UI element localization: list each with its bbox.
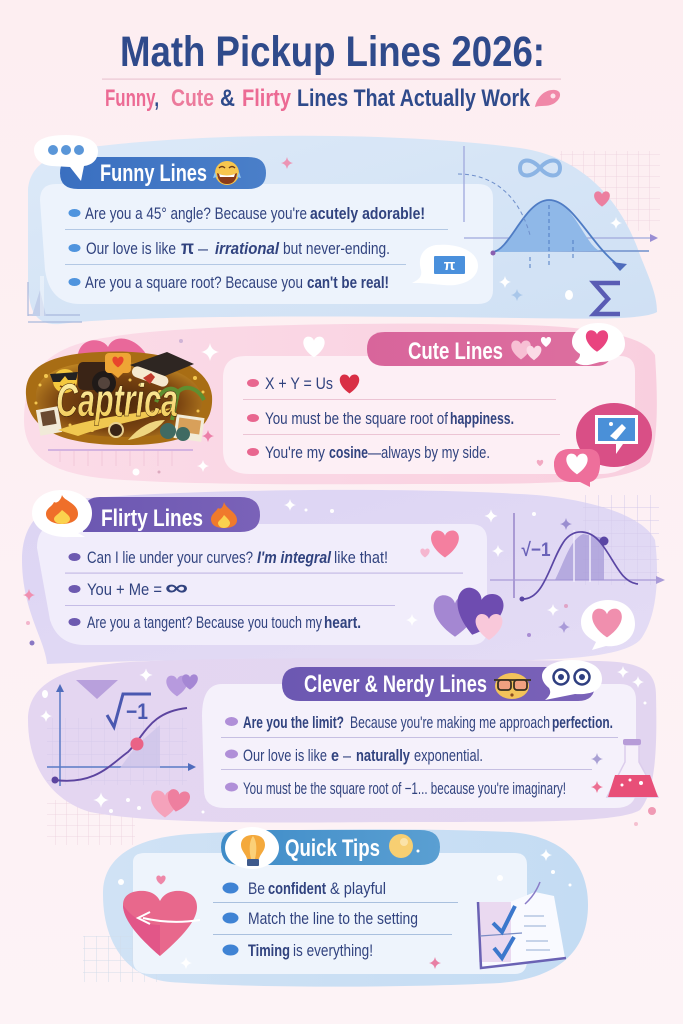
icon: heart with arrow [123, 876, 200, 956]
line 2: happiness. [450, 410, 514, 428]
line 2: irrational [215, 240, 279, 258]
panel: clever & nerdy lines [28, 658, 658, 826]
sigma symbol [594, 283, 620, 314]
line 2 [68, 575, 188, 600]
radical -1 label: √−1 [522, 540, 551, 561]
heading: Flirty Lines [101, 505, 203, 532]
logo: Captrica [26, 339, 212, 445]
header pill [60, 157, 266, 189]
subtitle [105, 85, 531, 112]
inner card [223, 356, 635, 474]
line 3: can't be real! [307, 274, 389, 292]
line 1: X + Y = Us [265, 375, 333, 393]
icon: red heart [340, 375, 359, 393]
decorative grid flirty [583, 495, 659, 585]
icon: pink hearts top [420, 530, 459, 558]
line 2: exponential. [414, 747, 483, 765]
subtitle: & [220, 85, 235, 112]
inner card [40, 184, 493, 304]
sparkles [284, 499, 504, 626]
line 1: perfection. [552, 714, 613, 732]
line 1: & playful [330, 880, 386, 898]
line 3: You're my [265, 444, 326, 462]
heading: Cute Lines [408, 338, 503, 365]
line 2: naturally [356, 747, 411, 765]
subtitle: Flirty [242, 85, 292, 112]
line 3: —always by my side. [368, 444, 490, 462]
line 1: Are you a 45° angle? Because you're [85, 205, 307, 223]
line 3: Timing [248, 942, 290, 960]
line 3: cosine [329, 444, 368, 462]
decorative grid nerdy [47, 800, 135, 845]
line 2: – [343, 747, 352, 765]
icon: white heart [303, 337, 325, 357]
icon: pink pick [535, 90, 560, 107]
icon: flame [211, 502, 237, 528]
subtitle: Funny, [105, 85, 159, 112]
radical -1 label: −1 [126, 699, 148, 724]
integral chart [490, 512, 665, 602]
panel: funny lines [28, 135, 658, 324]
icon: light bulb [225, 827, 279, 869]
line 1: like that! [334, 549, 388, 567]
icon: checklist [478, 882, 566, 968]
icon: pink heart [594, 191, 610, 207]
icon: sun ball [389, 834, 420, 858]
line 2: π [181, 238, 194, 259]
line 2: e [331, 747, 339, 765]
panel: cute lines [24, 323, 657, 487]
line 2: Our love is like [243, 747, 327, 765]
line 2: Match the line to the setting [248, 910, 418, 928]
header pill [367, 332, 612, 366]
triangle [76, 680, 118, 699]
icon: heart bubble [581, 600, 635, 650]
line 2: You + Me = [87, 581, 162, 599]
line 1: I'm integral [257, 549, 331, 567]
line 2: You must be the square root of [265, 410, 448, 428]
line 2: but never-ending. [283, 240, 390, 258]
bullet list [243, 375, 560, 462]
infinity symbol [520, 160, 560, 176]
line 1 [247, 375, 359, 393]
panel: quick tips [83, 827, 588, 987]
header pill [221, 830, 440, 865]
line 3: Are you a square root? Because you [85, 274, 303, 292]
small chart bottom left [28, 276, 82, 322]
bullet list [221, 714, 618, 798]
sparkles [281, 157, 293, 169]
icon: flask [607, 739, 658, 797]
radical -1 label [107, 694, 151, 727]
icon: flame bubble [32, 490, 92, 537]
line 3: is everything! [293, 942, 373, 960]
subtitle: Cute [171, 85, 214, 112]
function chart [47, 684, 196, 786]
axis under logo [48, 339, 219, 476]
heading: Quick Tips [285, 835, 380, 862]
line 1: Be [248, 880, 265, 898]
bullet list [65, 205, 448, 292]
line 1 [222, 880, 386, 898]
inner card [37, 524, 487, 645]
logo wordmark: Captrica [56, 374, 178, 426]
icon: pink hearts [151, 788, 191, 818]
icon: pi speech bubble [412, 245, 478, 285]
icon: purple hearts [166, 674, 198, 696]
line 2: Our love is like [86, 240, 176, 258]
icon: chat bubble with dots [34, 135, 98, 181]
line 3 [222, 942, 373, 960]
heading: Clever & Nerdy Lines [304, 671, 487, 698]
inner card [202, 684, 636, 808]
bullet list [213, 880, 458, 960]
line 2: – [198, 240, 209, 258]
icon: picture speech bubble [576, 403, 652, 467]
icon: white heart bubble [554, 449, 600, 487]
bullet list [65, 549, 463, 632]
bell curve chart [458, 146, 658, 271]
icon: nerd emoji [494, 673, 531, 699]
line 3: heart. [324, 614, 361, 632]
icon: laughing emoji [213, 161, 241, 185]
icon: pi speech bubble: π [444, 257, 456, 274]
decorative grid tips [83, 936, 161, 982]
decorative grid top right [560, 151, 660, 231]
line 1: confident [268, 880, 326, 898]
inner card [133, 853, 527, 974]
title: Math Pickup Lines 2026: [120, 28, 545, 76]
line 1: Because you're making me approach [350, 714, 550, 732]
line 3: Are you a tangent? Because you touch my [87, 614, 323, 632]
icon: pink hearts [511, 337, 551, 360]
line 2: ∞ [165, 575, 188, 600]
header pill [83, 497, 260, 532]
line 3 [247, 444, 490, 462]
line 1: Are you the limit? [243, 714, 344, 732]
header pill [282, 667, 595, 701]
panel: flirty lines [22, 490, 665, 664]
line 1: Can I lie under your curves? [87, 549, 253, 567]
icon: heart speech bubble [572, 323, 625, 365]
subtitle: Lines That Actually Work [297, 85, 531, 112]
icon: purple hearts [434, 585, 506, 641]
line 2 [225, 747, 483, 765]
line 2 [68, 238, 390, 259]
line 1: acutely adorable! [310, 205, 425, 223]
line 1 [225, 714, 613, 732]
icon: glasses bubble [542, 660, 602, 700]
heading: Funny Lines [100, 160, 207, 187]
line 1 [68, 549, 388, 567]
